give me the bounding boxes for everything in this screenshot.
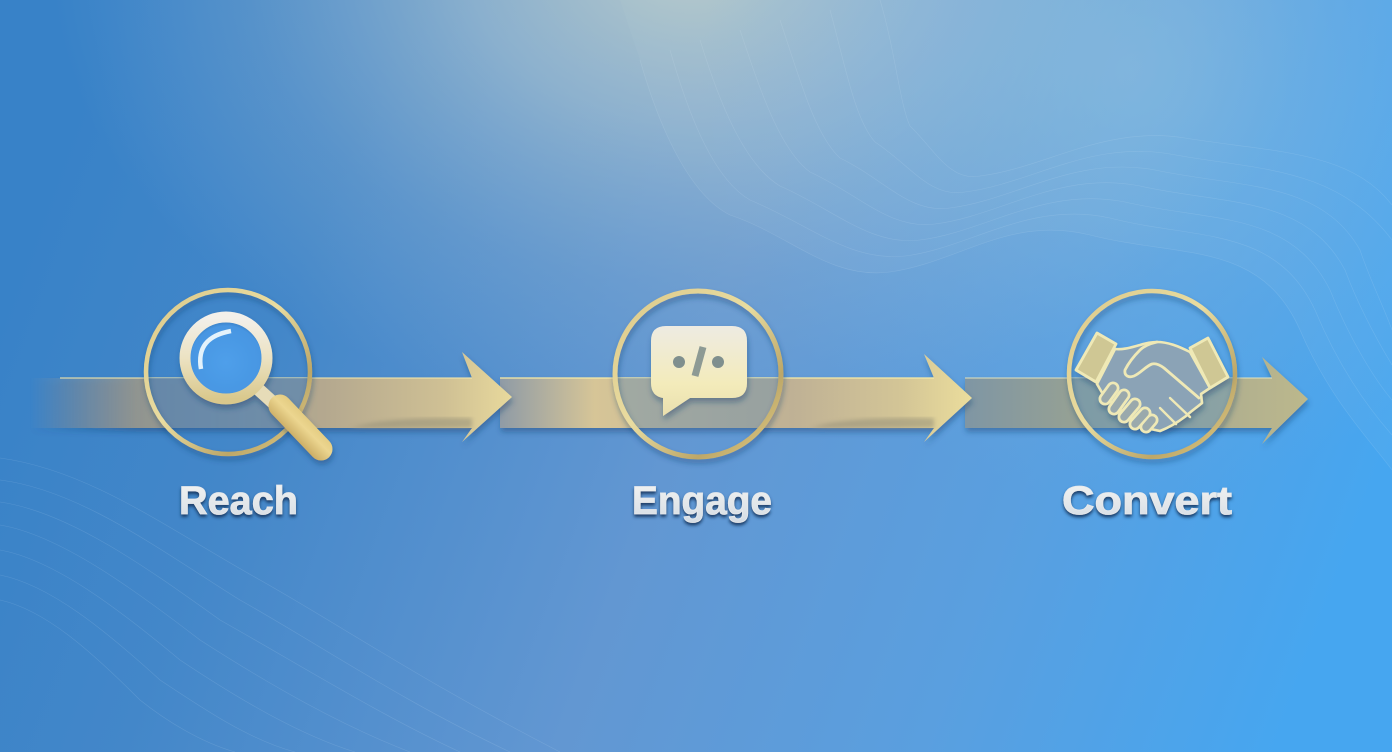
ring: Engage bbox=[615, 291, 781, 457]
step: Reach bbox=[140, 290, 321, 523]
label: Engage: Engage bbox=[632, 479, 772, 523]
step: Engage bbox=[610, 291, 786, 523]
icon: speech bubble bbox=[651, 326, 747, 416]
icon: magnifying glass bbox=[185, 317, 321, 449]
ring: Reach bbox=[146, 290, 310, 454]
ring: Convert bbox=[1069, 291, 1235, 457]
band veil: Convert bbox=[1065, 378, 1241, 428]
step: Convert bbox=[1062, 291, 1241, 523]
fingers bbox=[1105, 388, 1152, 427]
band veil: Reach bbox=[140, 378, 316, 428]
label: Reach: Reach bbox=[179, 479, 298, 523]
label: Convert: Convert bbox=[1062, 479, 1232, 523]
band veil: Engage bbox=[610, 378, 786, 428]
arrow 1 bbox=[30, 352, 512, 442]
arrow 3 bbox=[965, 357, 1308, 444]
icon: handshake bbox=[1076, 333, 1228, 431]
arrow 2 bbox=[500, 354, 972, 442]
